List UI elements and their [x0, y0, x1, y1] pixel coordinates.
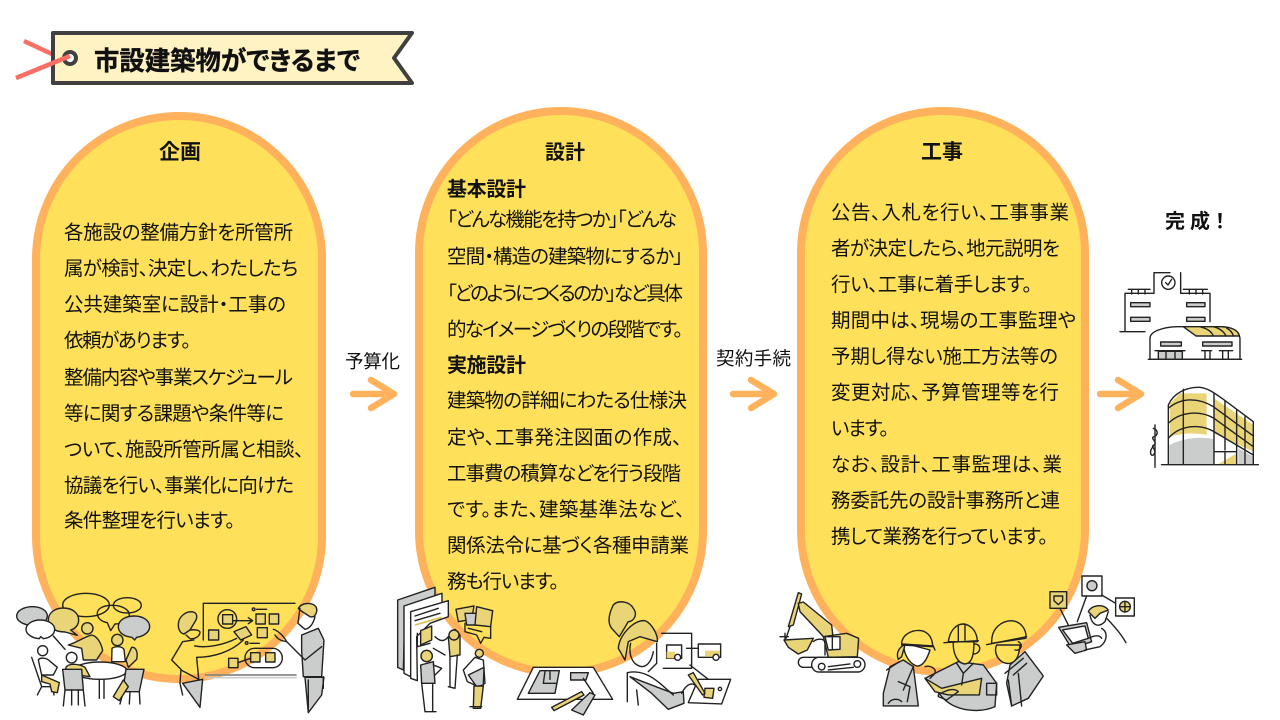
text block: construction description: 務委託先の設計事務所と連	[831, 490, 1060, 512]
text block: construction description: 予期し得ない施工方法等の	[831, 346, 1058, 368]
text block: construction description: 公告、入札を行い、工事事業	[831, 202, 1069, 224]
text block: construction description: います。	[831, 418, 889, 440]
text block: planning description: 条件整理を行います。	[64, 510, 235, 532]
arrow: design to construction	[733, 380, 774, 408]
icon: woman drafting	[609, 602, 731, 709]
text block: basic design: 「どのようにつくるのか」など具体	[447, 283, 683, 305]
text block: basic design: 空間・構造の建築物にするか」	[447, 246, 683, 268]
text block: detailed design: 定や、工事発注図面の作成、	[447, 427, 682, 449]
text block: construction description: 行い、工事に着手します。	[831, 274, 1032, 296]
panel: planning	[36, 116, 322, 679]
icon: blueprint	[517, 667, 613, 715]
text block: construction description: 変更対応、予算管理等を行	[831, 382, 1059, 404]
icon: excavator	[780, 593, 865, 672]
text block: basic design: 基本設計	[447, 178, 526, 201]
icon: whiteboard workshop	[172, 603, 324, 713]
text block: planning description: 等に関する課題や条件等に	[64, 403, 284, 425]
icon: right person	[273, 603, 324, 713]
text block: planning description: 各施設の整備方針を所管所	[64, 222, 293, 244]
panel: construction	[801, 111, 1085, 672]
label: budgeting: 予算化	[345, 351, 400, 372]
text block: construction description: なお、設計、工事監理は、業	[831, 454, 1062, 476]
text block: detailed design: 関係法令に基づく各種申請業	[447, 535, 689, 557]
text block: planning description: 整備内容や事業スケジュール	[64, 367, 293, 389]
icon: document review	[398, 587, 731, 715]
text block: basic design	[447, 178, 683, 341]
heading: planning: 企画	[159, 141, 201, 164]
label: contract procedure: 契約手続	[716, 348, 791, 369]
arrow: construction to completion	[1100, 380, 1141, 408]
text block: detailed design: 務も行います。	[447, 571, 559, 593]
text block: construction description	[831, 202, 1076, 548]
text block: planning description: 依頼があります。	[64, 330, 191, 352]
title tag	[16, 33, 412, 83]
heading: design: 設計	[545, 141, 585, 164]
heading: construction: 工事	[921, 140, 963, 164]
text block: planning description: 属が検討、決定し、わたしたち	[64, 258, 298, 280]
text block: basic design: 「どんな機能を持つか」「どんな	[447, 209, 677, 231]
text block: detailed design: です。また、建築基準法など、	[447, 499, 685, 521]
icon: engineer with laptop	[1050, 576, 1134, 653]
text block: basic design: 的なイメージづくりの段階です。	[447, 319, 683, 341]
icon: completed building	[1151, 387, 1258, 467]
text block: detailed design	[447, 354, 689, 593]
title text: 市設建築物ができるまで	[94, 46, 360, 76]
panel: design	[419, 111, 703, 673]
text block: planning description: 公共建築室に設計・工事の	[64, 294, 286, 316]
text block: planning description	[64, 222, 304, 532]
text block: construction description: 者が決定したら、地元説明を	[831, 238, 1060, 260]
icon: existing facilities	[1120, 273, 1242, 359]
icon: left person	[172, 612, 243, 707]
text block: planning description: ついて、施設所管所属と相談、	[64, 439, 304, 461]
text block: construction description: 携して業務を行っています。	[831, 526, 1048, 548]
icon: meeting group	[17, 593, 150, 706]
text block: detailed design: 工事費の積算などを行う段階	[447, 463, 681, 485]
text block: detailed design: 建築物の詳細にわたる仕様決	[447, 390, 687, 412]
icon: construction workers	[883, 621, 1043, 710]
text block: planning description: 協議を行い、事業化に向けた	[64, 475, 294, 497]
text block: construction description: 期間中は、現場の工事監理や	[831, 310, 1076, 332]
arrow: planning to design	[353, 380, 394, 408]
text block: detailed design: 実施設計	[447, 354, 526, 377]
heading: completion: 完成！	[1165, 209, 1225, 233]
